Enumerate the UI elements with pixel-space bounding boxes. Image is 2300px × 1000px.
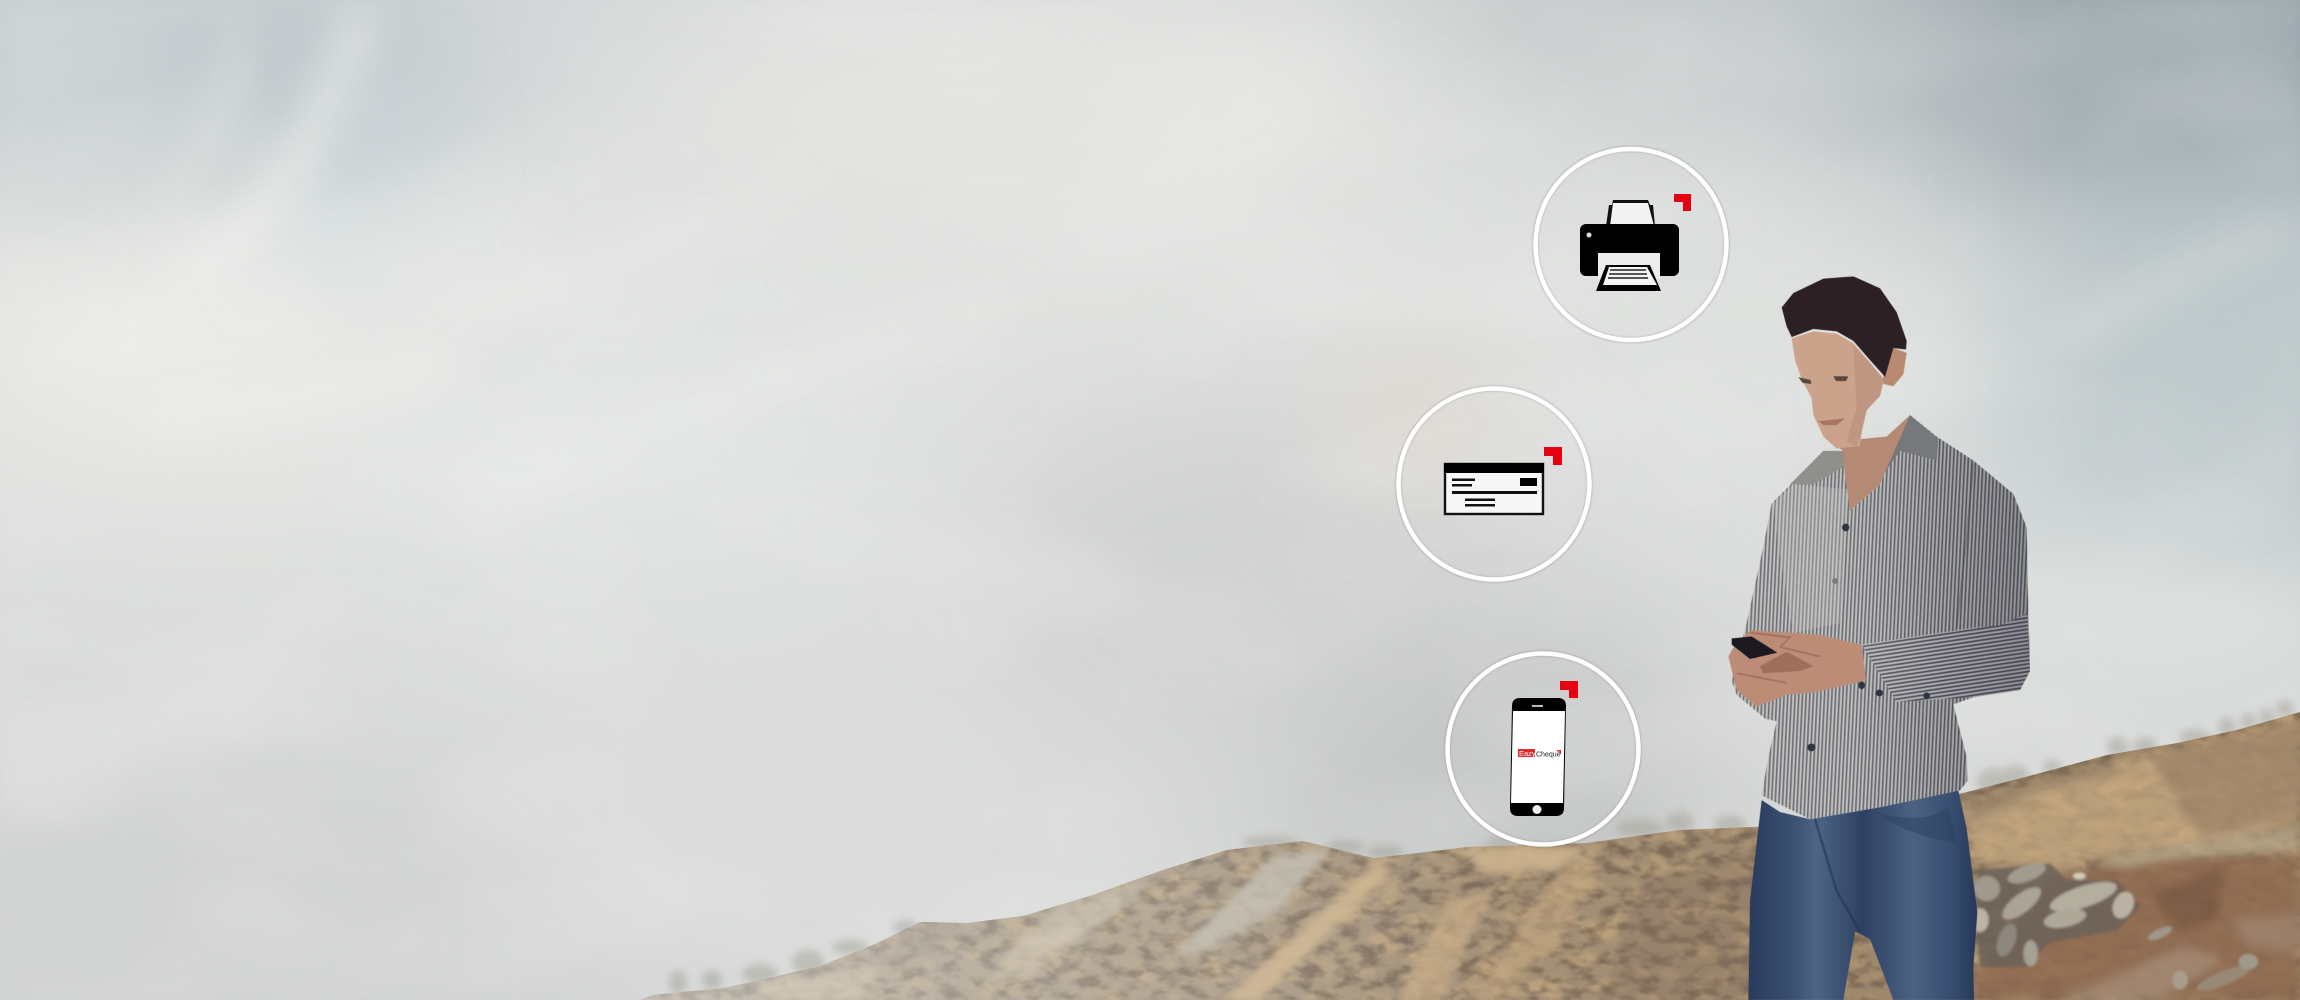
face (1792, 331, 1884, 448)
mountain range (640, 690, 2300, 1000)
man holding smartphone (1728, 276, 2030, 1000)
red corner marker (1560, 681, 1578, 698)
hill-crest trees (669, 700, 2294, 994)
right hillside (1963, 720, 2300, 1000)
red corner marker (1674, 194, 1691, 211)
cheque ring (1398, 388, 1590, 580)
phone in hand (1732, 636, 1777, 659)
mobile app option (1448, 654, 1638, 844)
jeans (1748, 790, 1977, 1000)
icon: cheque (1444, 463, 1544, 514)
red corner marker (1544, 447, 1562, 465)
printer option (1536, 149, 1726, 340)
shirt (1732, 415, 2030, 819)
boulders (1971, 859, 2258, 996)
EazyCheque logo: Cheque (1536, 752, 1561, 758)
mobile ring (1448, 654, 1638, 844)
icon: smartphone with EazyCheque logo (1510, 698, 1566, 816)
ear (1883, 348, 1907, 386)
EazyCheque logo (1518, 749, 1561, 758)
hands (1728, 630, 1866, 707)
cheque option (1398, 388, 1590, 580)
hair (1782, 276, 1907, 377)
cloud wisps (160, 20, 2290, 510)
mid-slope light streaks (760, 845, 1760, 1000)
icon: printer (1580, 200, 1679, 291)
EazyCheque logo: Eazy (1519, 749, 1536, 758)
printer ring (1536, 149, 1726, 340)
path along hillside (2093, 827, 2300, 868)
neck (1827, 415, 1910, 511)
